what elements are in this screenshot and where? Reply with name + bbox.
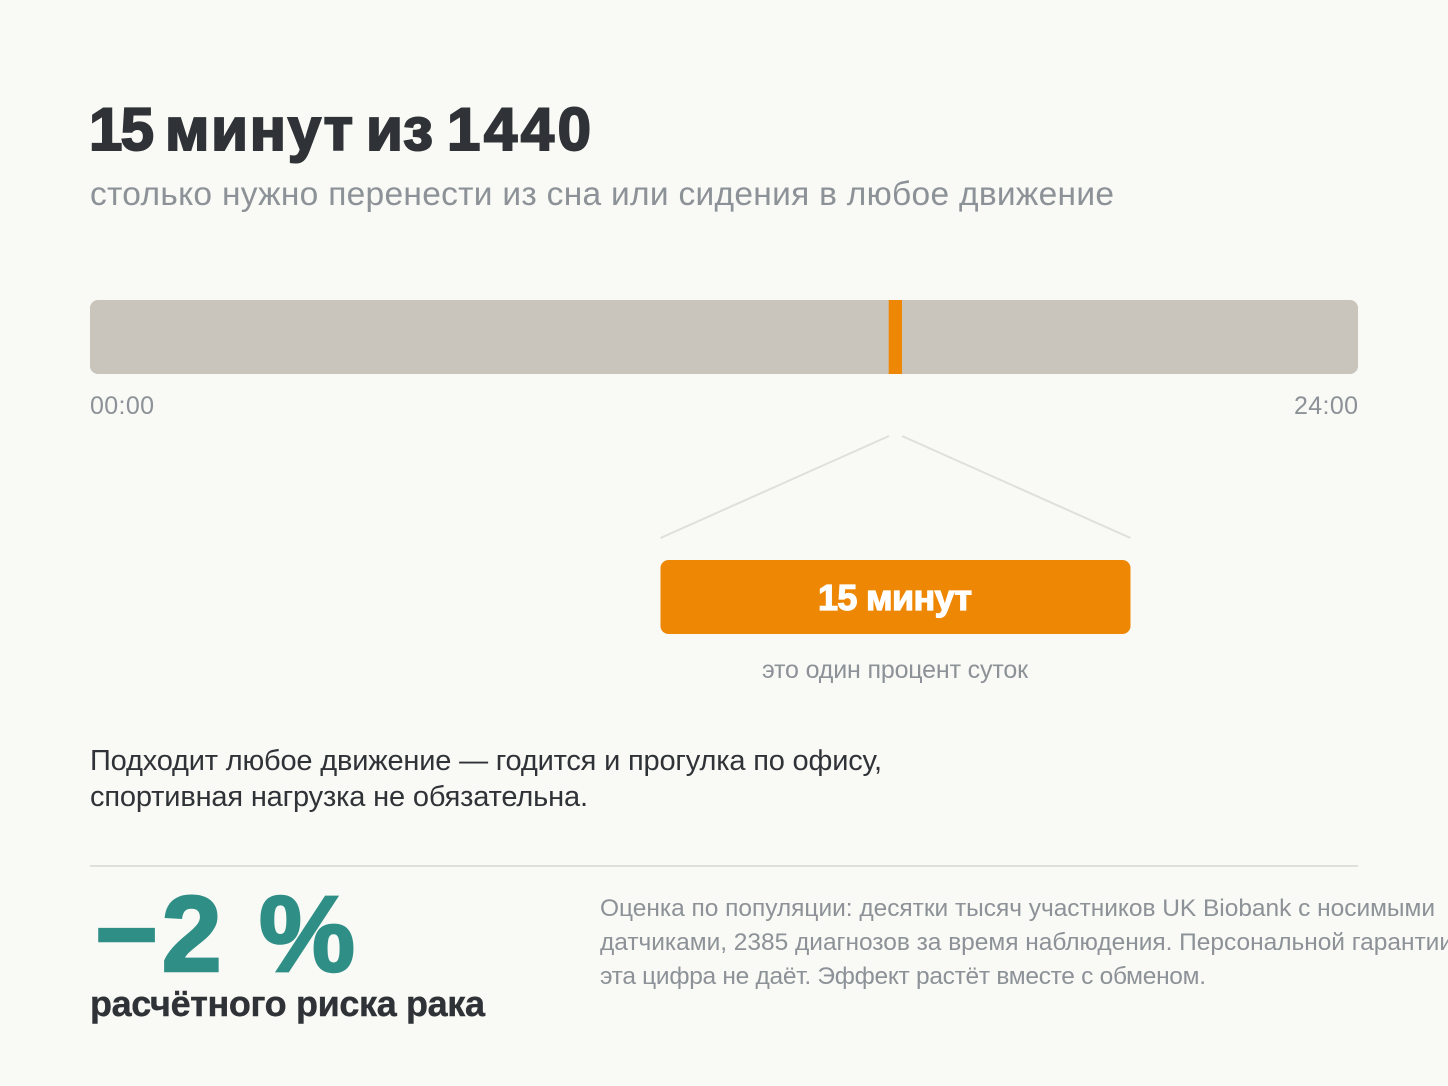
source note: эта цифра не даёт. Эффект растёт вместе с обменом. bbox=[600, 963, 1206, 990]
title: 15 bbox=[89, 96, 154, 163]
callout: 15 minutes bbox=[660, 560, 1130, 634]
timeline start label: 00:00 bbox=[90, 392, 154, 420]
callout caption: это один процент суток bbox=[762, 656, 1029, 684]
body text bbox=[90, 745, 882, 813]
title: минут bbox=[165, 96, 353, 163]
body text: спортивная нагрузка не обязательна. bbox=[90, 781, 588, 813]
callout text: 15 минут bbox=[818, 577, 972, 618]
statistic label: расчётного риска рака bbox=[90, 983, 486, 1024]
full day bar bbox=[90, 300, 1358, 374]
title: 1440 bbox=[447, 96, 591, 163]
body text: Подходит любое движение — годится и прогулка по офису, bbox=[90, 745, 882, 777]
timeline end label: 24:00 bbox=[1294, 392, 1358, 420]
zoom connector lines bbox=[660, 436, 1130, 538]
source note: датчиками, 2385 диагнозов за время наблюдения. Персональной гарантии bbox=[600, 929, 1448, 956]
title: из bbox=[366, 96, 433, 163]
callout box bbox=[660, 560, 1130, 634]
day timeline bar bbox=[90, 300, 1358, 374]
subtitle: столько нужно перенести из сна или сидения в любое движение bbox=[90, 176, 1114, 213]
15 minute segment bbox=[889, 300, 902, 374]
source note bbox=[600, 895, 1448, 990]
statistic: minus 2 percent: −2 % bbox=[95, 873, 355, 994]
source note: Оценка по популяции: десятки тысяч участников UK Biobank с носимыми bbox=[600, 895, 1435, 922]
